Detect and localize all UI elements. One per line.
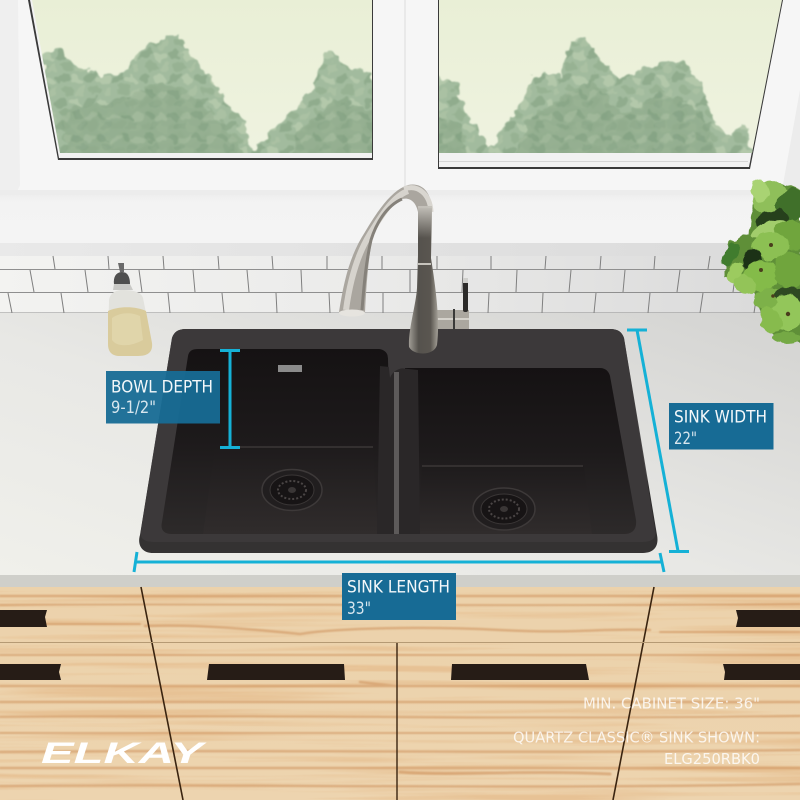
right bowl floor <box>418 466 592 534</box>
label: sink length: SINK LENGTH <box>347 578 450 596</box>
cabinet door gaps <box>0 587 800 800</box>
countertop <box>0 313 800 587</box>
faucet spout <box>339 184 432 316</box>
sink width dimension line <box>627 330 689 552</box>
cabinet size and model note <box>513 694 760 768</box>
faucet handle and lever <box>430 278 469 330</box>
right drain <box>473 488 535 530</box>
cabinet handles <box>0 610 800 680</box>
sink basin <box>139 329 657 553</box>
label: sink width: SINK WIDTH <box>674 408 767 426</box>
soap bottle <box>108 263 152 356</box>
label: bowl depth: BOWL DEPTH <box>111 378 213 396</box>
wall and window frame <box>0 0 800 260</box>
left bowl floor <box>203 447 378 534</box>
label: sink width: 22" <box>674 429 697 448</box>
cabinet size and model note: ELG250RBK0 <box>664 750 760 768</box>
sink length dimension line <box>134 552 664 572</box>
subway tile backsplash <box>0 256 800 314</box>
label: sink length: 33" <box>347 599 371 618</box>
cabinet size and model note: MIN. CABINET SIZE: 36" <box>583 694 760 712</box>
Elkay logo: ELKAY <box>41 737 208 770</box>
overflow plate <box>278 365 302 372</box>
left drain <box>262 470 322 510</box>
bowl divider <box>377 366 420 534</box>
faucet neck <box>409 206 438 354</box>
label: bowl depth: 9-1/2" <box>111 398 156 417</box>
label: sink length <box>342 573 456 620</box>
label: sink width <box>669 403 774 450</box>
bowl depth dimension line <box>220 350 240 448</box>
right bowl <box>400 368 636 534</box>
left bowl <box>161 349 392 534</box>
right window with garden view <box>432 0 783 169</box>
label: bowl depth <box>106 371 220 424</box>
cabinet size and model note: QUARTZ CLASSIC® SINK SHOWN: <box>513 728 760 746</box>
left window with garden view <box>28 0 380 170</box>
wood cabinets <box>0 587 800 800</box>
sink outer deck <box>139 329 657 553</box>
plant <box>719 174 800 344</box>
faucet <box>339 184 469 354</box>
